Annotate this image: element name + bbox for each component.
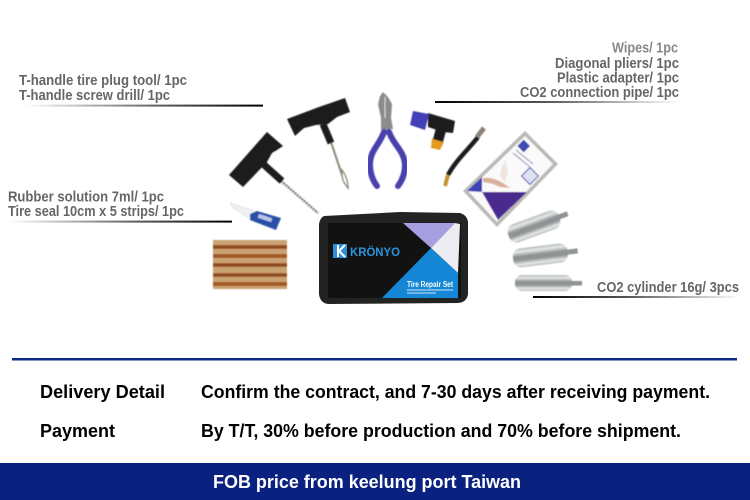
label: wipes, pliers, adapter, pipe: Diagonal pliers/ 1pc (555, 56, 679, 72)
icon: T-handle plug tool (287, 98, 350, 188)
icon: tire seal strips (213, 240, 287, 289)
icon: plastic adapter (410, 111, 455, 150)
logo: Kronyo (333, 244, 400, 259)
label: rubber solution and tire seal (8, 190, 232, 223)
footer band (0, 463, 750, 500)
text: payment row: Payment (40, 420, 115, 441)
logo: Kronyo: KRÖNYO (350, 246, 400, 259)
label: T-handle tools: T-handle screw drill/ 1pc (19, 88, 170, 104)
icon: wipes sachet (463, 131, 558, 227)
label: wipes, pliers, adapter, pipe: Plastic adapter/ 1pc (557, 70, 679, 86)
label: wipes, pliers, adapter, pipe: Wipes/ 1pc (612, 40, 678, 56)
label: wipes, pliers, adapter, pipe: CO2 connection pipe/ 1pc (520, 85, 679, 101)
icon: diagonal pliers (370, 92, 405, 186)
icon: CO2 cylinders (505, 205, 582, 291)
text: delivery detail row: Confirm the contract, and 7-30 days after receiving payment. (201, 381, 710, 402)
bag title (407, 280, 453, 293)
label: wipes, pliers, adapter, pipe (435, 40, 680, 103)
label: rubber solution and tire seal: Tire seal 10cm x 5 strips/ 1pc (8, 204, 184, 220)
divider rule (12, 358, 737, 360)
icon: rubber solution tube (230, 203, 281, 230)
icon: T-handle screw drill (229, 132, 318, 213)
text: payment row: By T/T, 30% before production and 70% before shipment. (201, 420, 681, 441)
text: delivery detail row: Delivery Detail (40, 381, 165, 402)
footer band: FOB price from keelung port Taiwan (213, 471, 521, 492)
icon: CO2 connection pipe (445, 128, 484, 186)
label: T-handle tools (19, 73, 263, 107)
label: rubber solution and tire seal: Rubber solution 7ml/ 1pc (8, 190, 164, 206)
panel: tire repair bag (319, 212, 468, 304)
label: T-handle tools: T-handle tire plug tool/ 1pc (19, 73, 187, 89)
bag title: Tire Repair Set (407, 280, 453, 289)
